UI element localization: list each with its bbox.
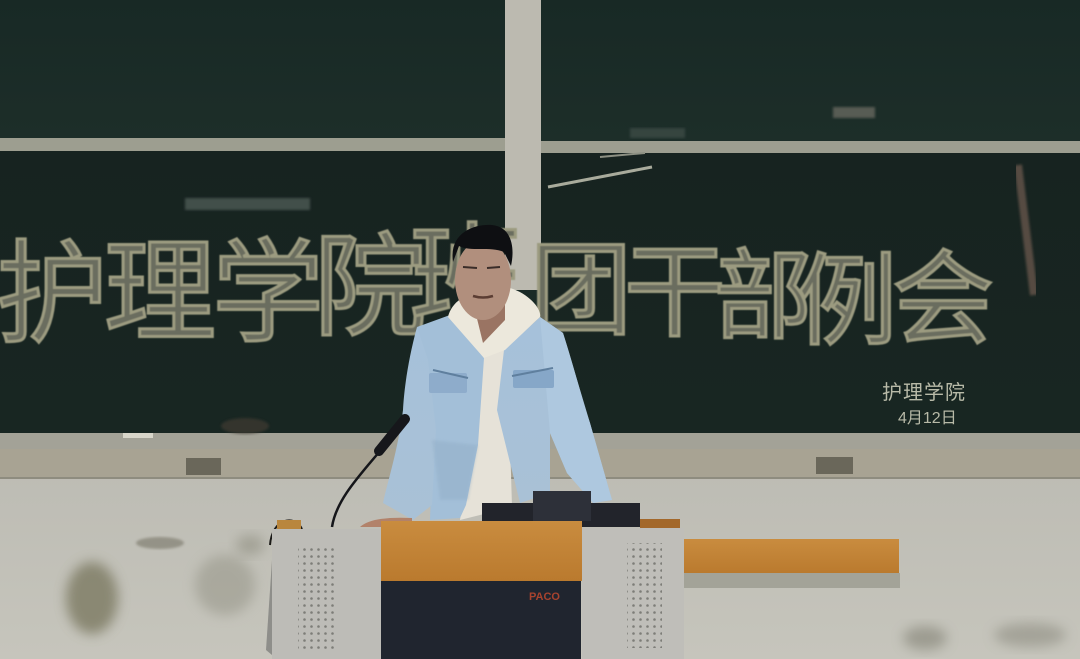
chalk heading: 院 (314, 225, 426, 350)
blackboard (0, 0, 1080, 449)
chalk note: date: 护理学院 (882, 381, 966, 404)
neck and hood (448, 288, 540, 358)
chalk note: date (882, 381, 966, 427)
chalk heading: 例 (797, 246, 897, 358)
speaker (383, 225, 612, 520)
jeans jacket (383, 315, 612, 520)
chalk heading: 干 (624, 236, 726, 350)
wall (0, 448, 1080, 659)
chalk heading: 班 (410, 215, 522, 340)
podium (266, 491, 900, 659)
microphone (332, 419, 405, 527)
chalk heading: 部 (714, 241, 812, 351)
face and hair (453, 225, 513, 320)
chalk heading: 理 (104, 230, 216, 355)
chalk heading: 学 (212, 231, 324, 356)
podium: PACO (529, 591, 560, 603)
chalk heading: 团 (530, 234, 632, 348)
white shirt (460, 340, 512, 520)
chalk heading: 会 (892, 243, 994, 357)
chalk heading (0, 215, 994, 358)
chalk note: date: 4月12日 (898, 410, 957, 427)
